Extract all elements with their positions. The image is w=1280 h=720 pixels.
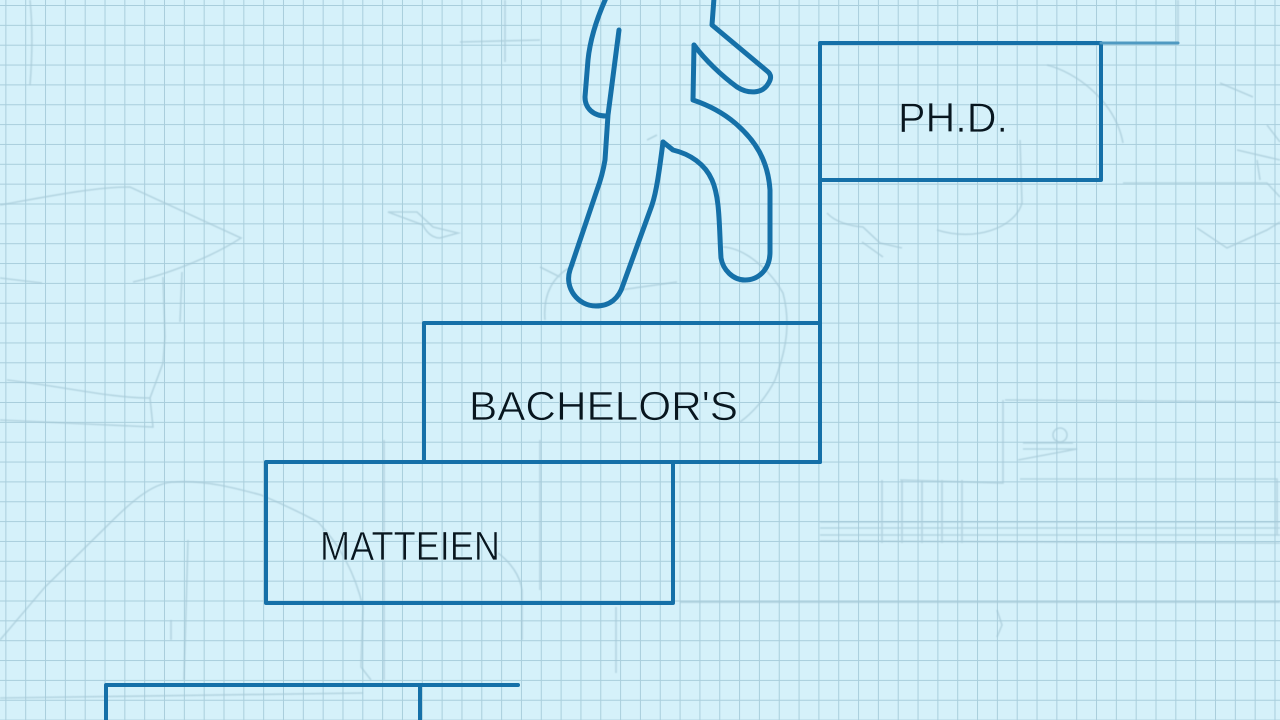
step extension line (1101, 42, 1178, 44)
sketch: right side desk (680, 400, 1280, 637)
figure: front leg (663, 45, 770, 280)
sketch: graduation cap (0, 187, 241, 427)
label: BACHELOR'S: BACHELOR'S (469, 383, 738, 429)
sketch: lower left curves (0, 440, 616, 698)
step: lowest box (106, 685, 518, 720)
icon: climbing figure (569, 0, 771, 306)
sketch: circle behind the foot (540, 135, 787, 422)
step: Master's box (266, 462, 673, 603)
sketch: upper right doodles (827, 0, 1280, 257)
sketch: small doodle and upper lines (30, 0, 540, 238)
label: PH.D.: PH.D. (898, 94, 1008, 141)
figure: back arm (585, 0, 606, 116)
staircase outline (106, 43, 1178, 720)
step: PH.D. box (820, 43, 1101, 462)
label: garbled master's: MATTEIEN (320, 523, 500, 569)
step: Bachelor's box (424, 323, 820, 462)
figure: front arm (694, 0, 771, 92)
figure: back leg (569, 30, 663, 306)
